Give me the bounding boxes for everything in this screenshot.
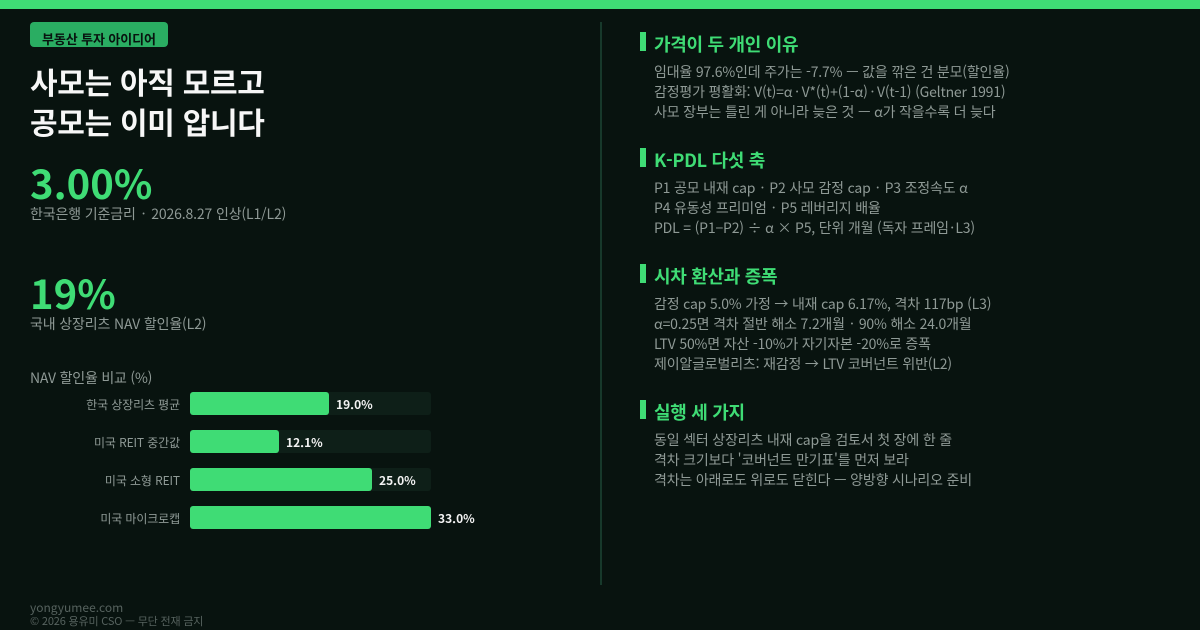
bar chart: NAV discount comparison: 25.0% bbox=[379, 472, 416, 489]
tag pill bbox=[30, 22, 168, 47]
body text: 임대율 97.6%인데 주가는 -7.7% — 값을 깎은 건 분모(할인율) bbox=[654, 62, 1010, 82]
body text: P4 유동성 프리미엄 · P5 레버리지 배율 bbox=[654, 198, 881, 218]
heading: 실행 세 가지 bbox=[654, 399, 745, 425]
bar chart: NAV discount comparison: 한국 상장리츠 평균 bbox=[86, 396, 180, 413]
footer: © 2026 용유미 CSO — 무단 전재 금지 bbox=[30, 613, 203, 629]
panel: why the price diverges bbox=[640, 31, 1010, 122]
body text: 격차 크기보다 '코버넌트 만기표'를 먼저 보라 bbox=[654, 450, 909, 470]
bar: US small REIT bbox=[190, 468, 372, 491]
body text: 동일 섹터 상장리츠 내재 cap을 검토서 첫 장에 한 줄 bbox=[654, 430, 952, 450]
body text bbox=[654, 430, 972, 490]
bar chart: NAV discount comparison bbox=[30, 368, 475, 529]
body text: 감정 cap 5.0% 가정 → 내재 cap 6.17%, 격차 117bp (L3) bbox=[654, 294, 991, 314]
bar chart: NAV discount comparison: 미국 소형 REIT bbox=[105, 472, 180, 489]
body text: P1 공모 내재 cap · P2 사모 감정 cap · P3 조정속도 α bbox=[654, 178, 968, 198]
stat caption: 국내 상장리츠 NAV 할인율(L2) bbox=[30, 314, 206, 334]
body text: PDL = (P1−P2) ÷ α × P5, 단위 개월 (독자 프레임·L3) bbox=[654, 218, 975, 238]
top accent bar bbox=[0, 0, 1200, 9]
stat caption: 한국은행 기준금리 · 2026.8.27 인상(L1/L2) bbox=[30, 204, 286, 224]
bar chart: NAV discount comparison: 33.0% bbox=[438, 510, 475, 527]
title: 사모는 아직 모르고 bbox=[30, 59, 265, 103]
bar chart: NAV discount comparison: 미국 마이크로캡 bbox=[100, 510, 180, 527]
stat value: 19% bbox=[30, 263, 116, 321]
body text: LTV 50%면 자산 -10%가 자기자본 -20%로 증폭 bbox=[654, 334, 931, 354]
body text: 사모 장부는 틀린 게 아니라 늦은 것 — α가 작을수록 더 늦다 bbox=[654, 102, 995, 122]
stat value: 3.00% bbox=[30, 153, 152, 211]
panel: lag conversion and amplification bbox=[640, 263, 991, 374]
footer site: yongyumee.com bbox=[30, 599, 123, 616]
body text: α=0.25면 격차 절반 해소 7.2개월 · 90% 해소 24.0개월 bbox=[654, 314, 972, 334]
vertical divider bbox=[600, 22, 602, 585]
bar chart: NAV discount comparison: 19.0% bbox=[336, 396, 373, 413]
footer bbox=[30, 599, 203, 629]
title: 공모는 이미 압니다 bbox=[30, 99, 265, 143]
bar chart: NAV discount comparison: 미국 REIT 중간값 bbox=[94, 434, 180, 451]
body text: 격차는 아래로도 위로도 닫힌다 — 양방향 시나리오 준비 bbox=[654, 470, 972, 490]
panel: K-PDL five axes bbox=[640, 147, 975, 238]
heading: K-PDL 다섯 축 bbox=[654, 147, 765, 173]
panel: three actions bbox=[640, 399, 972, 490]
chart title: NAV 할인율 비교 (%) bbox=[30, 368, 152, 388]
body text: 감정평가 평활화: V(t)=α·V*(t)+(1-α)·V(t-1) (Geltner 1991) bbox=[654, 82, 1005, 102]
bar chart: NAV discount comparison: 12.1% bbox=[286, 434, 323, 451]
stat: base rate bbox=[30, 153, 286, 224]
title bbox=[30, 59, 265, 143]
heading: 가격이 두 개인 이유 bbox=[654, 31, 798, 57]
body text bbox=[654, 62, 1010, 122]
body text bbox=[654, 178, 975, 238]
bar: Korea listed REIT average bbox=[190, 392, 329, 415]
heading: 시차 환산과 증폭 bbox=[654, 263, 777, 289]
stat: NAV discount bbox=[30, 263, 206, 334]
bar: US microcap bbox=[190, 506, 431, 529]
body text: 제이알글로벌리츠: 재감정 → LTV 코버넌트 위반(L2) bbox=[654, 354, 952, 374]
body text bbox=[654, 294, 991, 374]
bar: US REIT median bbox=[190, 430, 279, 453]
